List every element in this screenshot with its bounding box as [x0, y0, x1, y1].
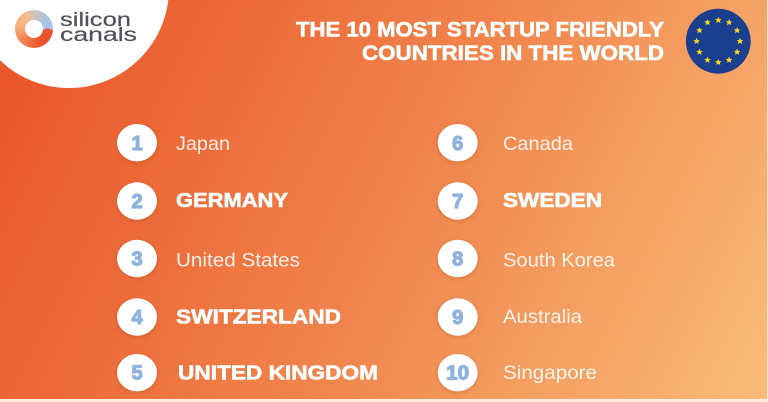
rank 8: South Korea	[438, 240, 615, 277]
rank 5: United Kingdom: 5	[131, 362, 143, 384]
icon: EU flag	[686, 9, 751, 74]
rank 8: South Korea: South Korea	[503, 250, 615, 272]
rank 5: United Kingdom	[117, 354, 378, 391]
rank 8: South Korea: 8	[452, 248, 463, 270]
logo wordmark	[60, 9, 137, 46]
rank 3: United States	[117, 240, 300, 277]
logo wordmark: silicon	[60, 9, 131, 31]
icon: logo ring	[15, 10, 53, 48]
title: COUNTRIES IN THE WORLD	[362, 42, 664, 65]
rank 4: Switzerland: 4	[131, 307, 143, 329]
rank 10: Singapore: 10	[446, 362, 469, 384]
rank 10: Singapore	[438, 354, 597, 391]
rank 1: Japan	[117, 124, 230, 161]
title	[296, 18, 664, 65]
logo: Silicon Canals	[15, 9, 137, 48]
title: THE 10 MOST STARTUP FRIENDLY	[296, 18, 664, 42]
rank 6: Canada	[438, 124, 573, 161]
rank 3: United States: 3	[131, 248, 143, 270]
rank 7: Sweden	[438, 182, 602, 220]
logo panel: white corner circle	[0, 0, 169, 88]
logo wordmark: canals	[60, 24, 137, 46]
rank 7: Sweden: 7	[452, 191, 463, 213]
rank 4: Switzerland	[117, 298, 341, 336]
rank 1: Japan: Japan	[176, 133, 230, 155]
rank 4: Switzerland: SWITZERLAND	[176, 306, 341, 328]
rank 9: Australia: 9	[452, 307, 463, 329]
rank 6: Canada: Canada	[503, 133, 573, 155]
rank 5: United Kingdom: UNITED KINGDOM	[178, 362, 378, 384]
rank 9: Australia: Australia	[503, 306, 582, 328]
rank 3: United States: United States	[176, 250, 300, 272]
rank 7: Sweden: SWEDEN	[503, 189, 602, 212]
rank 2: Germany: 2	[131, 191, 143, 213]
rank 9: Australia	[438, 298, 582, 336]
rank 10: Singapore: Singapore	[503, 362, 597, 384]
rank 6: Canada: 6	[452, 133, 463, 155]
rank 2: Germany: GERMANY	[176, 189, 288, 212]
rank 2: Germany	[117, 182, 288, 220]
rank 1: Japan: 1	[131, 133, 143, 155]
